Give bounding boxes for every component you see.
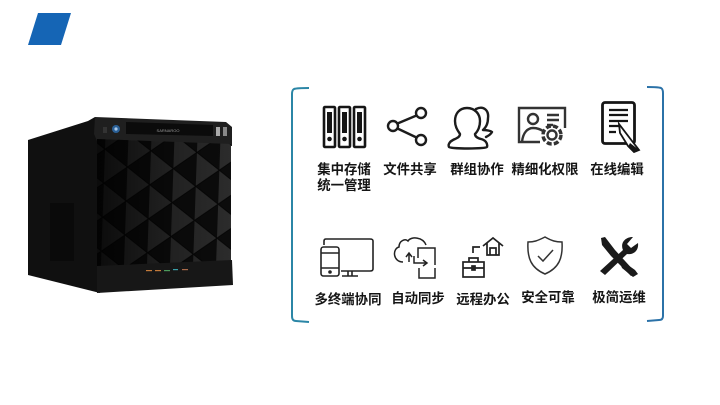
feature: centralized storage: 集中存储 (317, 161, 371, 177)
feature: fine-grained permissions (512, 108, 579, 177)
feature: auto sync (391, 238, 445, 306)
icon: wrench and screwdriver (600, 237, 638, 277)
left bracket (292, 88, 309, 322)
feature: online editing (590, 102, 644, 177)
feature: remote work: 远程办公 (456, 291, 510, 307)
feature: easy operations: 极简运维 (592, 289, 646, 305)
feature: remote work (456, 238, 510, 307)
feature: centralized storage (317, 107, 371, 193)
feature: file sharing: 文件共享 (383, 161, 437, 177)
top front bar (94, 117, 232, 146)
NAS server product: SARNAROO (157, 128, 179, 133)
feature: file sharing (383, 108, 437, 177)
corner parallelogram (28, 13, 71, 45)
icon: briefcase and house (463, 238, 503, 277)
feature: easy operations (592, 237, 646, 305)
bottom LED band (97, 260, 233, 293)
feature: centralized storage: 统一管理 (317, 177, 371, 193)
feature: group collaboration: 群组协作 (450, 161, 504, 177)
icon: users (449, 108, 492, 148)
NAS server product (28, 117, 233, 293)
icon: ID card with gear (519, 108, 565, 144)
side face (28, 117, 100, 293)
icon: shield with check (528, 237, 562, 274)
feature: fine-grained permissions: 精细化权限 (512, 161, 579, 177)
icon: share (388, 108, 426, 145)
icon: monitor and phone (321, 239, 373, 276)
feature: secure and reliable (521, 237, 575, 305)
feature: online editing: 在线编辑 (590, 161, 644, 177)
right bracket (647, 87, 663, 321)
feature: multi-terminal collaboration: 多终端协同 (315, 291, 381, 307)
feature: auto sync: 自动同步 (391, 290, 445, 306)
feature: group collaboration (449, 108, 504, 177)
diamond front panel (96, 138, 232, 268)
feature: multi-terminal collaboration (315, 239, 381, 307)
icon: binders (324, 107, 365, 147)
feature: secure and reliable: 安全可靠 (521, 289, 575, 305)
icon: cloud and phone sync (394, 238, 435, 278)
icon: document and pen (602, 102, 639, 153)
